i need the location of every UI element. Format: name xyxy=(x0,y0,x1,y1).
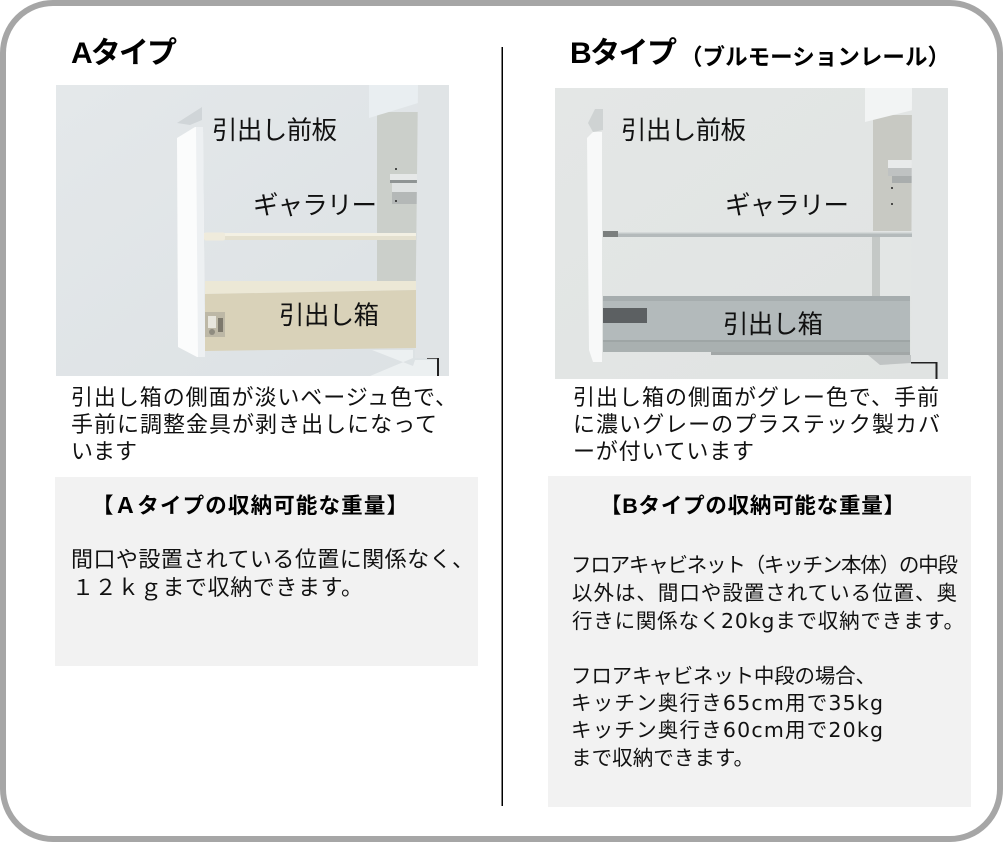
panel heading B: 【Bタイプの収納可能な重量】 xyxy=(600,494,905,518)
description B: ーが付いています xyxy=(573,439,754,464)
photo labels A: 引出し前板 xyxy=(212,117,337,145)
photo labels A: 引出し箱 xyxy=(279,302,379,330)
description B: に濃いグレーのプラステック製カバ xyxy=(573,412,940,437)
drawer box B xyxy=(603,296,910,355)
description B: 引出し箱の側面がグレー色で、手前 xyxy=(573,385,939,410)
photo labels B: 引出し前板 xyxy=(621,117,746,145)
capacity text B2: フロアキャビネット中段の場合、 xyxy=(571,664,876,688)
capacity text B1 xyxy=(571,553,964,633)
photo labels B xyxy=(621,117,849,339)
description A: います xyxy=(71,439,137,464)
panel: A type capacity xyxy=(55,477,478,666)
photo: B type drawer xyxy=(555,88,948,379)
heading: B type: （ブルモーションレール） xyxy=(680,44,950,70)
capacity text A: １２ｋｇまで収納できます。 xyxy=(72,575,363,600)
heading: B type: Bタイプ xyxy=(570,37,677,70)
photo: A type drawer xyxy=(56,85,449,376)
drawer box A xyxy=(205,281,416,351)
capacity text B2: キッチン奥行き60cm用で20kg xyxy=(571,718,883,742)
description A: 手前に調整金具が剥き出しになって xyxy=(71,412,437,437)
capacity text A xyxy=(71,547,474,600)
heading: B type xyxy=(570,37,950,70)
description A xyxy=(71,385,457,464)
slide rail B xyxy=(888,160,912,205)
capacity text B1: フロアキャビネット（キッチン本体）の中段 xyxy=(571,553,958,577)
capacity text B2 xyxy=(571,664,883,770)
gallery rail B xyxy=(603,231,912,237)
panel heading A: 【Ａタイプの収納可能な重量】 xyxy=(92,494,408,518)
cabinet top box A xyxy=(369,85,418,118)
cabinet right column B xyxy=(911,88,948,379)
photo labels A xyxy=(212,117,379,330)
description B xyxy=(573,385,940,464)
cabinet right column A xyxy=(415,85,449,376)
drawer front panel B xyxy=(587,109,603,362)
capacity text B2: まで収納できます。 xyxy=(571,746,754,770)
photo labels A: ギャラリー xyxy=(253,192,377,220)
drawer front panel A xyxy=(177,107,205,357)
photo labels B: ギャラリー xyxy=(725,192,849,220)
panel: B type capacity xyxy=(548,476,971,807)
capacity text B2: キッチン奥行き65cm用で35kg xyxy=(571,691,883,715)
photo labels B: 引出し箱 xyxy=(723,311,823,339)
slide rail A xyxy=(390,168,417,204)
description A: 引出し箱の側面が淡いベージュ色で、 xyxy=(71,385,457,410)
capacity text B1: 行きに関係なく20kgまで収納できます。 xyxy=(572,609,964,633)
cabinet side panel A xyxy=(377,112,418,281)
heading: A type: Aタイプ xyxy=(71,37,177,70)
capacity text A: 間口や設置されている位置に関係なく、 xyxy=(71,547,474,572)
cabinet side panel B xyxy=(873,115,912,231)
gallery rail A xyxy=(204,232,416,240)
centre divider xyxy=(502,47,503,806)
capacity text B1: 以外は、間口や設置されている位置、奥 xyxy=(572,581,957,605)
cabinet top box B xyxy=(865,88,913,122)
gallery post B xyxy=(872,237,880,297)
